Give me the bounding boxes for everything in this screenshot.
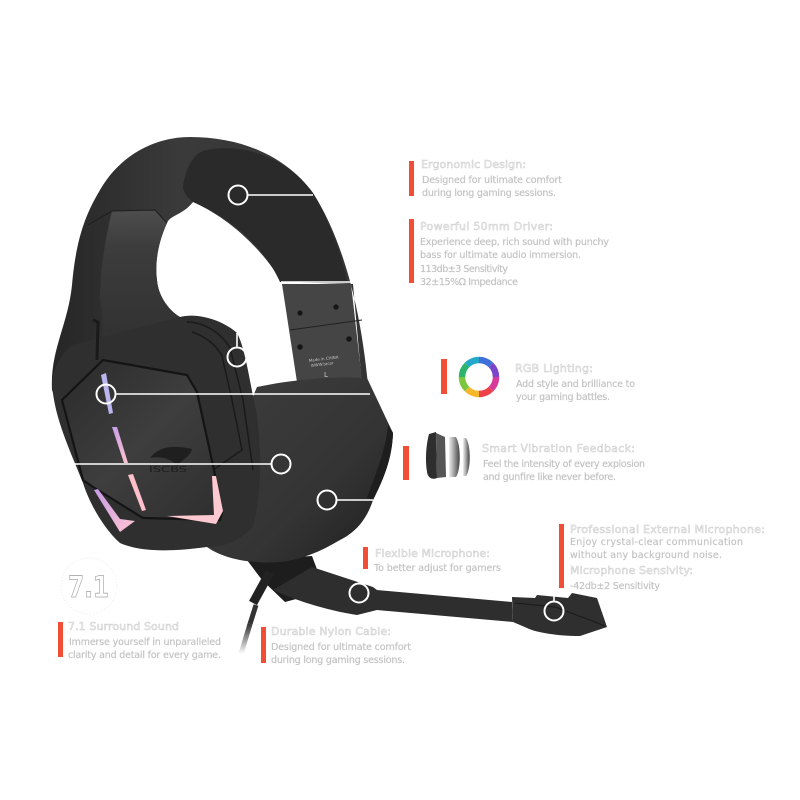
icon: 7.1 badge — [61, 558, 117, 614]
cushion side edge — [367, 425, 393, 500]
microphone arm — [273, 567, 607, 636]
rear ear cushion — [207, 377, 393, 562]
adjustable strap with print — [282, 284, 362, 382]
icon: rainbow ring — [462, 360, 496, 394]
cable — [241, 572, 270, 654]
feature: 7.1 surround sound: clarity and detail for every game. — [68, 650, 221, 661]
feature: powerful driver: Experience deep, rich sound with punchy — [420, 237, 609, 248]
feature: RGB lighting: RGB Lighting: — [515, 362, 593, 375]
feature: flexible microphone: To better adjust for gamers — [373, 563, 501, 574]
feature: durable nylon cable: Designed for ultimate comfort — [271, 642, 411, 653]
feature: ergonomic design: Ergonomic Design: — [421, 158, 526, 171]
microphone joint and neck — [247, 556, 322, 602]
feature: flexible microphone: Flexible Microphone: — [375, 547, 490, 560]
callout lines and markers — [55, 186, 564, 620]
feature: 7.1 surround sound: 7.1 Surround Sound — [68, 620, 179, 633]
feature: ergonomic design: during long gaming sessions. — [422, 188, 556, 199]
feature: RGB lighting: your gaming battles. — [516, 392, 610, 403]
feature: powerful driver: 113db±3 Sensitivity — [420, 264, 508, 275]
inner ear cup — [52, 316, 260, 550]
feature: powerful driver: bass for ultimate audio immersion. — [420, 250, 581, 261]
icon: vibrating ear cup — [426, 432, 470, 479]
feature: powerful driver — [409, 219, 609, 288]
feature: ergonomic design — [409, 158, 562, 199]
brand logo — [149, 447, 192, 474]
adjustable strap with print: Made in CHINA — [309, 354, 339, 363]
adjustable strap with print: L — [324, 371, 328, 379]
feature: powerful driver: Powerful 50mm Driver: — [420, 220, 553, 233]
feature: durable nylon cable: during long gaming sessions. — [271, 655, 405, 666]
RGB light strips — [94, 373, 223, 532]
feature: durable nylon cable — [261, 625, 411, 666]
feature: professional external microphone: Professional External Microphone: — [570, 523, 765, 536]
feature: professional external microphone: Enjoy crystal-clear communication — [570, 537, 743, 548]
feature: powerful driver: 32±15%Ω Impedance — [420, 277, 518, 288]
feature: smart vibration feedback: Smart Vibration Feedback: — [482, 442, 635, 455]
feature: professional external microphone: without any background noise. — [570, 550, 722, 561]
feature: RGB lighting — [441, 359, 635, 403]
cup concentric ridges — [187, 322, 253, 470]
brand logo: ISCBS — [149, 465, 187, 474]
feature: RGB lighting: Add style and brilliance to — [516, 379, 635, 390]
feature: professional external microphone: Microphone Sensivity: — [570, 564, 693, 577]
headset illustration — [52, 137, 607, 654]
icon: 7.1 badge: 7.1 — [68, 570, 109, 604]
feature: professional external microphone: -42db±2 Sensitivity — [570, 581, 660, 592]
feature: smart vibration feedback: Feel the intensity of every explosion — [483, 459, 645, 470]
feature: flexible microphone — [363, 547, 501, 574]
feature: durable nylon cable: Durable Nylon Cable: — [271, 625, 391, 638]
adjustable strap with print: WWW.tacor — [311, 360, 334, 368]
headband — [52, 137, 368, 410]
feature: ergonomic design: Designed for ultimate comfort — [422, 175, 562, 186]
feature: smart vibration feedback: and gunfire like never before. — [483, 472, 616, 483]
feature: professional external microphone — [559, 523, 765, 592]
feature: 7.1 surround sound — [58, 558, 221, 661]
feature: smart vibration feedback — [403, 432, 645, 483]
feature: 7.1 surround sound: Immerse yourself in unparalleled — [69, 637, 221, 648]
